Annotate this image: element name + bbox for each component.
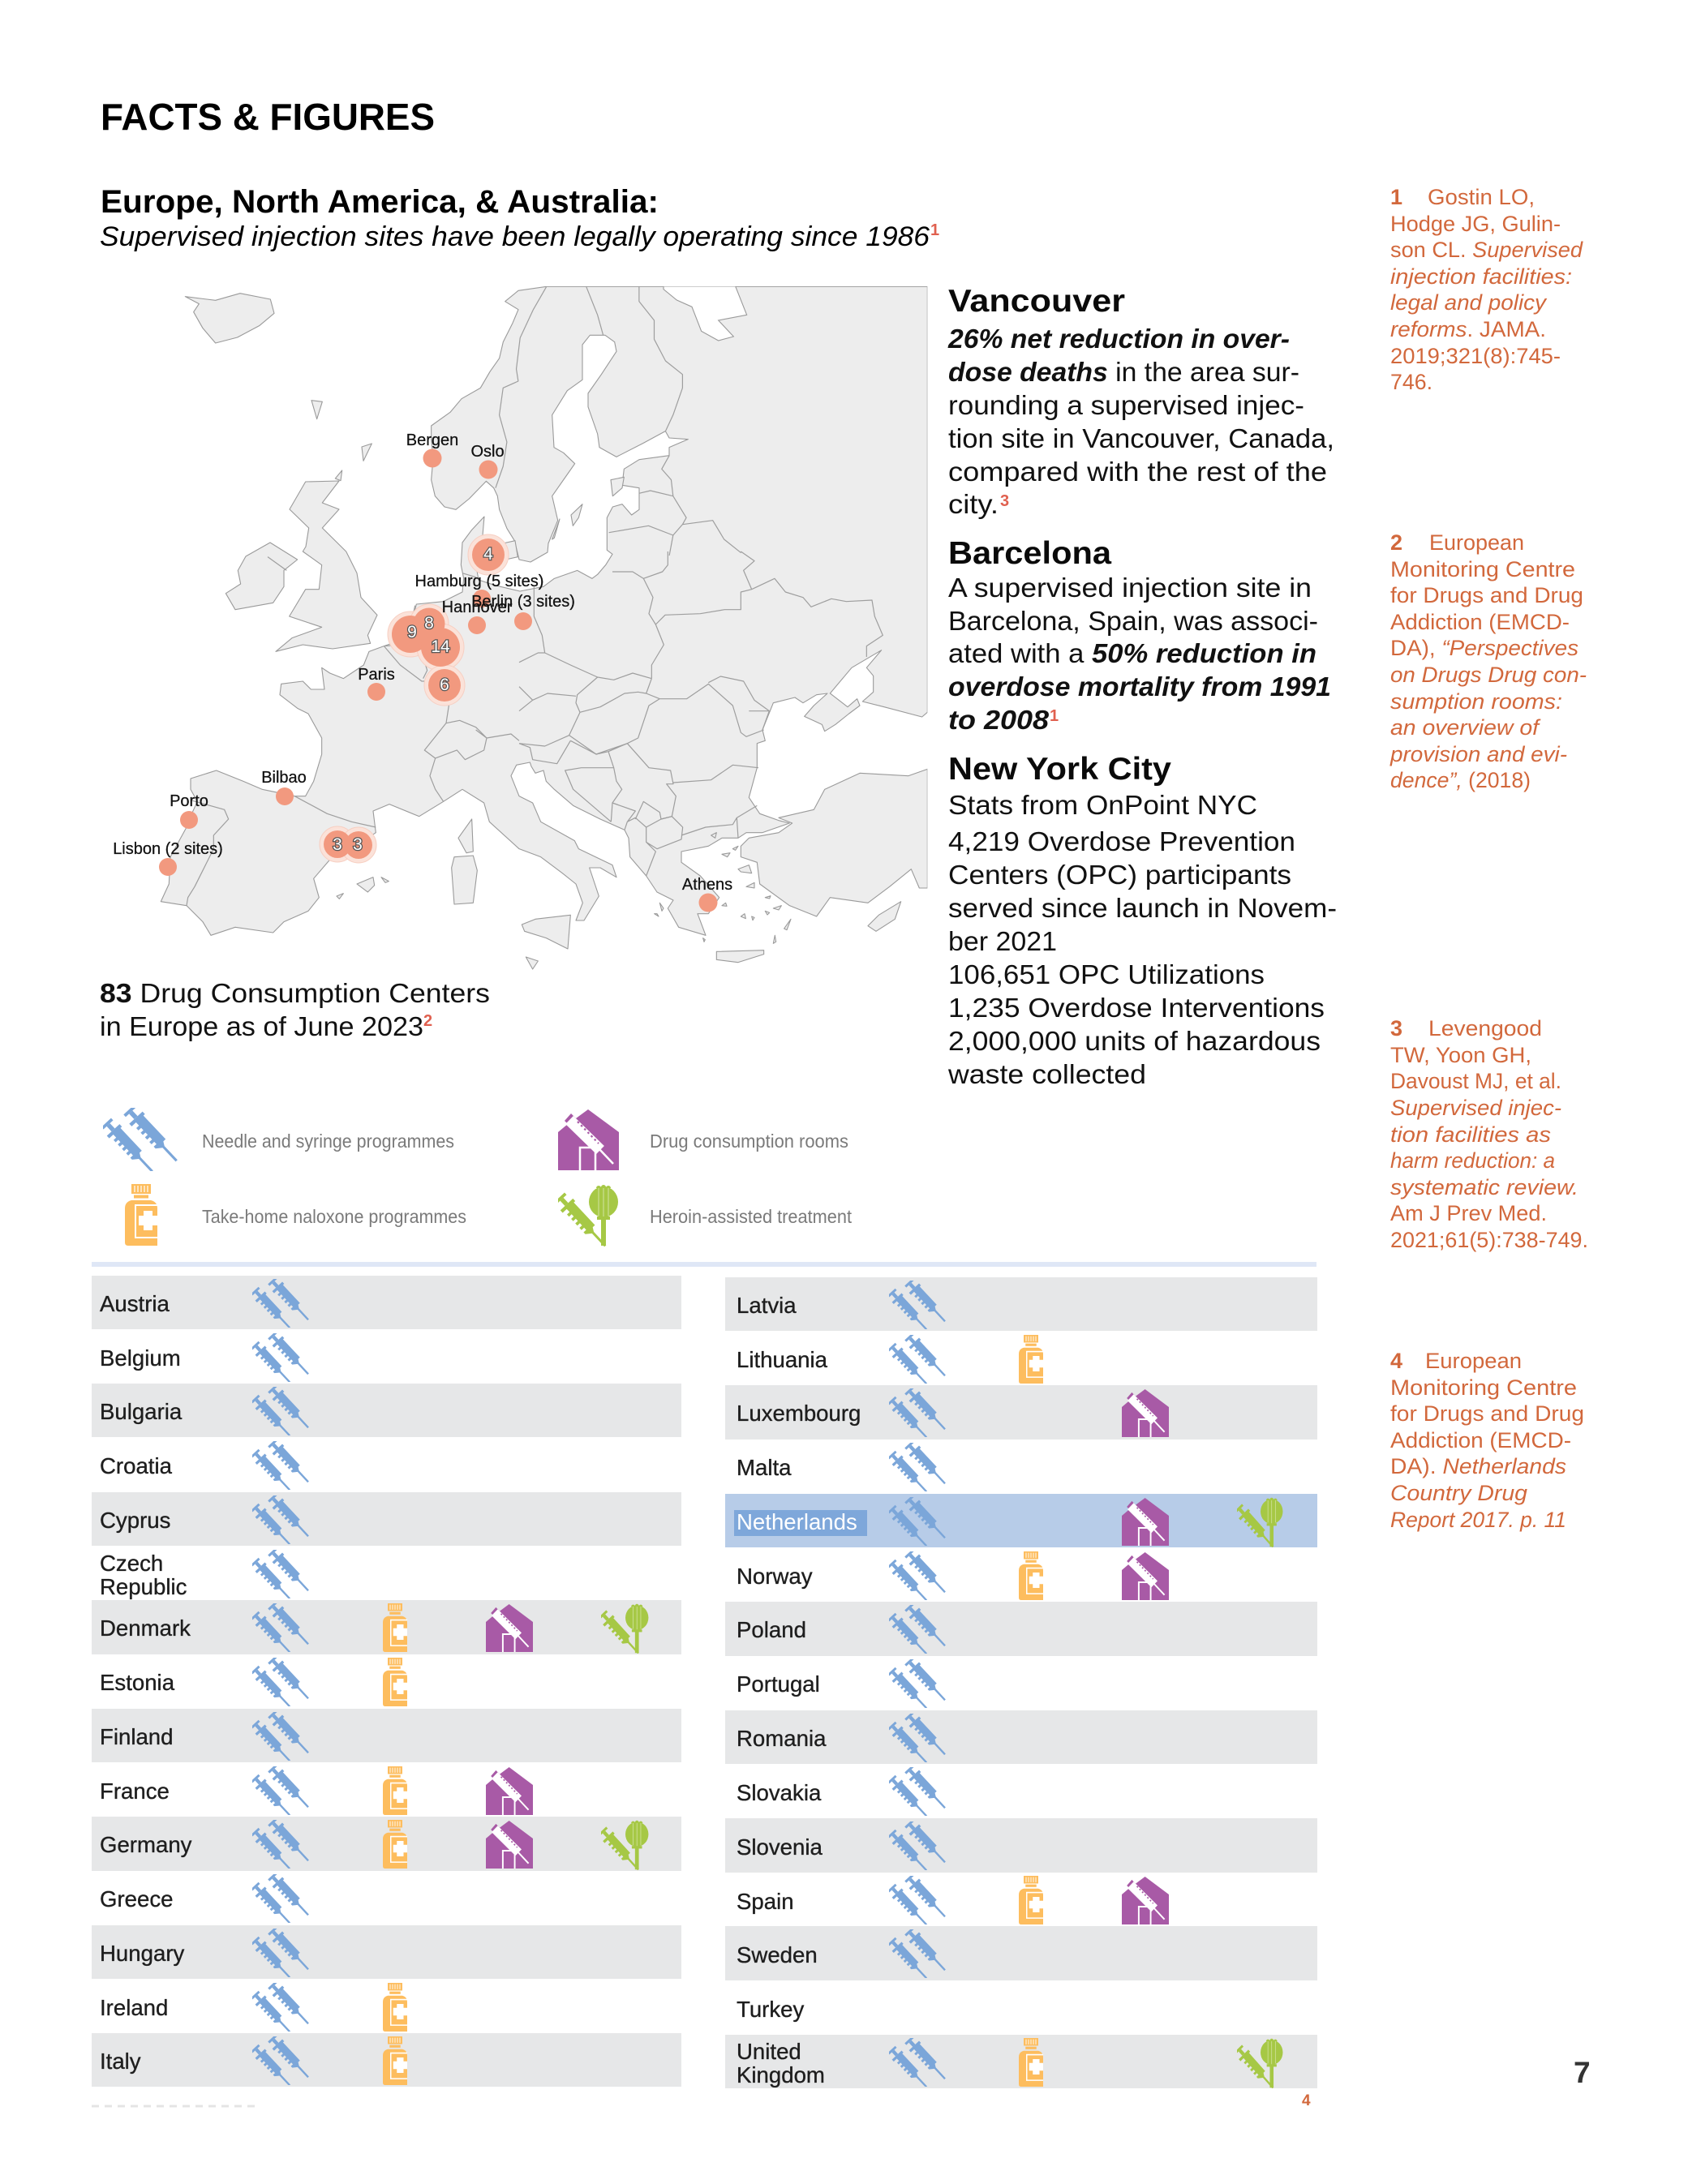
row: Croatia [100, 1438, 313, 1495]
panel: New York City [947, 752, 1337, 1089]
map labels: 3 [333, 835, 342, 854]
row: Cyprus [92, 1492, 681, 1549]
row: Estonia: Estonia [100, 1670, 175, 1695]
reference 2: provision and evi- [1389, 742, 1567, 766]
reference 1 [1390, 185, 1583, 394]
map labels: Hannover [442, 599, 513, 616]
map labels: 8 [424, 614, 434, 633]
row: Finland [92, 1709, 681, 1766]
row: Poland: Poland [737, 1617, 806, 1642]
panel: Vancouver: 26% net reduction in over- [947, 324, 1290, 354]
row: Italy: Italy [100, 2049, 141, 2074]
row: Finland: Finland [100, 1724, 174, 1749]
panel: New York City: 4,219 Overdose Prevention [948, 826, 1295, 856]
panel: New York City: Stats from OnPoint NYC [948, 790, 1257, 820]
footnote marker: 4 [1302, 2092, 1311, 2109]
row: Luxembourg: Luxembourg [737, 1401, 861, 1426]
reference 3: 3 [1390, 1016, 1402, 1041]
row: Austria: Austria [100, 1291, 170, 1316]
row: Ireland: Ireland [100, 1995, 168, 2020]
row: United Kingdom: Kingdom [737, 2062, 825, 2087]
panel: New York City: New York City [948, 752, 1171, 787]
map labels: Porto [170, 792, 208, 810]
reference 4: Report 2017. p. 11 [1390, 1508, 1566, 1532]
reference 1: Hodge JG, Gulin- [1390, 212, 1561, 236]
reference 2: dence”, (2018) [1390, 768, 1531, 792]
row: United Kingdom [725, 2035, 1317, 2092]
panel: Barcelona [948, 536, 1331, 735]
panel: Barcelona: Barcelona, Spain, was associ- [948, 606, 1318, 636]
map caption: 2 [423, 1012, 432, 1030]
map labels: Hamburg (5 sites) [415, 573, 543, 590]
map labels: Bergen [406, 431, 458, 449]
reference 1: injection facilities: [1390, 264, 1572, 289]
map of Europe [113, 286, 927, 969]
reference 1: 1 [1390, 185, 1402, 209]
table: left column [92, 1276, 681, 2090]
page number: 7 [1574, 2056, 1591, 2089]
row: Latvia [725, 1277, 1317, 1334]
reference 3: Supervised injec- [1390, 1096, 1561, 1120]
reference 3: TW, Yoon GH, [1390, 1043, 1531, 1067]
icon: needle and syringe [100, 1104, 183, 1178]
map caption: 83 Drug Consumption Centers [100, 978, 490, 1008]
reference 3: systematic review. [1390, 1175, 1578, 1199]
row: France [100, 1763, 533, 1820]
reference 4: Addiction (EMCD- [1390, 1428, 1571, 1452]
reference 2: Addiction (EMCD- [1390, 610, 1570, 634]
row: Slovenia [725, 1818, 1317, 1875]
row: Spain: Spain [737, 1889, 794, 1914]
map caption: in Europe as of June 2023 [100, 1011, 423, 1041]
reference 3: harm reduction: a [1390, 1148, 1555, 1173]
row: Germany: Germany [100, 1832, 192, 1857]
reference 3: Levengood [1428, 1016, 1542, 1041]
panel: Barcelona: 1 [1050, 707, 1059, 725]
reference 2: sumption rooms: [1390, 689, 1562, 714]
row: Hungary: Hungary [100, 1941, 185, 1966]
panel: Barcelona: overdose mortality from 1991 [948, 672, 1331, 702]
row: Greece [100, 1871, 313, 1928]
map labels: 4 [483, 545, 493, 564]
panel: New York City: 2,000,000 units of hazardous [948, 1026, 1321, 1056]
row: Sweden: Sweden [737, 1942, 818, 1967]
subheading: 1 [930, 221, 939, 239]
row: Malta [737, 1440, 950, 1496]
reference 3: Davoust MJ, et al. [1390, 1069, 1561, 1093]
legend label: heroin-assisted treatment: Heroin-assisted treatment [650, 1206, 853, 1227]
reference 2: an overview of [1390, 715, 1541, 740]
reference 1: son CL. Supervised [1390, 238, 1583, 262]
row: Slovenia: Slovenia [737, 1834, 823, 1860]
row: Sweden [725, 1926, 1317, 1983]
icon: heroin-assisted treatment [553, 1185, 618, 1252]
reference 4: for Drugs and Drug [1390, 1401, 1584, 1426]
panel: Barcelona: Barcelona [948, 536, 1111, 571]
reference 1: Gostin LO, [1428, 185, 1535, 209]
reference 4: Country Drug [1390, 1481, 1527, 1505]
reference 2: for Drugs and Drug [1390, 583, 1583, 607]
reference 2: on Drugs Drug con- [1390, 663, 1587, 687]
row: Lithuania [737, 1332, 1043, 1388]
panel: New York City: ber 2021 [948, 926, 1057, 956]
row: Croatia: Croatia [100, 1453, 173, 1478]
reference 2: DA), “Perspectives [1390, 636, 1578, 660]
map labels: Berlin (3 sites) [471, 593, 575, 611]
legend label: needle and syringe: Needle and syringe programmes [202, 1131, 454, 1152]
row: Denmark: Denmark [100, 1615, 191, 1641]
reference 4 [1390, 1349, 1584, 1532]
panel: New York City: Centers (OPC) participants [948, 860, 1291, 890]
row: Cyprus: Cyprus [100, 1508, 170, 1533]
legend label: take-home naloxone: Take-home naloxone programmes [202, 1206, 466, 1227]
row: Romania: Romania [737, 1726, 827, 1751]
row: Estonia [100, 1654, 407, 1711]
row: Czech Republic: Czech [100, 1551, 163, 1576]
panel: New York City: served since launch in Novem- [948, 893, 1337, 923]
panel: New York City: 1,235 Overdose Interventions [948, 993, 1325, 1023]
map markers [159, 449, 717, 912]
map labels: 9 [407, 623, 417, 641]
panel: Vancouver [947, 284, 1334, 519]
panel: New York City: waste collected [947, 1059, 1146, 1089]
row: Portugal: Portugal [737, 1671, 820, 1697]
row: Italy [92, 2033, 681, 2090]
reference 4: Monitoring Centre [1390, 1375, 1577, 1400]
panel: Barcelona: A supervised injection site in [948, 573, 1312, 603]
row: France: France [100, 1779, 170, 1804]
legend label: drug consumption rooms: Drug consumption rooms [650, 1131, 848, 1152]
reference 1: 746. [1390, 370, 1432, 394]
map labels [113, 431, 732, 894]
row: Lithuania: Lithuania [737, 1347, 828, 1372]
panel: Vancouver: Vancouver [948, 284, 1125, 319]
map labels: Bilbao [261, 769, 307, 787]
reference 2: European [1429, 530, 1524, 555]
panel: Barcelona: to 2008 [948, 705, 1050, 735]
row: Portugal [737, 1656, 950, 1713]
row: Germany [92, 1817, 681, 1874]
row: Netherlands (highlighted) [725, 1494, 1317, 1551]
row: Belgium [100, 1330, 313, 1387]
row: Latvia: Latvia [737, 1293, 797, 1318]
reference 3: Am J Prev Med. [1390, 1201, 1547, 1225]
row: Turkey: Turkey [737, 1997, 805, 2022]
row: Bulgaria [92, 1384, 681, 1440]
row: Malta: Malta [737, 1455, 792, 1480]
reference 1: 2019;321(8):745- [1390, 344, 1561, 368]
icon: naloxone bottle [125, 1184, 157, 1246]
row: Poland [725, 1602, 1317, 1658]
map labels: 3 [353, 835, 363, 854]
panel: Barcelona: ated with a 50% reduction in [948, 638, 1316, 668]
row: Denmark [92, 1600, 681, 1658]
row: Belgium: Belgium [100, 1345, 181, 1371]
reference 4: DA). Netherlands [1390, 1454, 1566, 1478]
row: Luxembourg [725, 1385, 1317, 1442]
row: Norway: Norway [737, 1564, 813, 1589]
panel: Vancouver: dose deaths in the area sur- [948, 357, 1299, 387]
row: Bulgaria: Bulgaria [100, 1399, 183, 1424]
panel: Vancouver: 3 [1000, 492, 1009, 510]
row: Netherlands (highlighted): Netherlands [737, 1509, 857, 1534]
legend [100, 1104, 853, 1252]
panel: Vancouver: tion site in Vancouver, Canada, [948, 423, 1334, 453]
row: Romania [725, 1710, 1317, 1767]
reference 2: 2 [1390, 530, 1402, 555]
title: FACTS & FIGURES [101, 96, 435, 138]
map caption [100, 978, 490, 1041]
row: Czech Republic: Republic [100, 1574, 187, 1599]
map labels: Athens [682, 876, 732, 894]
row: Spain [737, 1873, 1169, 1929]
heading: regions: Europe, North America, & Australia: [101, 184, 659, 220]
row: Hungary [92, 1925, 681, 1982]
subheading: Supervised injection sites have been legally operating since 1986 [100, 221, 930, 252]
reference 1: legal and policy [1390, 290, 1548, 315]
reference 4: European [1425, 1349, 1522, 1373]
map labels: Lisbon (2 sites) [113, 840, 223, 858]
map labels: Oslo [470, 443, 505, 461]
reference 4: 4 [1390, 1349, 1402, 1373]
table: right column [725, 1277, 1317, 2092]
row: United Kingdom: United [737, 2039, 801, 2064]
panel: New York City: 106,651 OPC Utilizations [948, 959, 1265, 989]
map labels: Paris [358, 666, 395, 684]
reference 1: reforms. JAMA. [1390, 317, 1546, 341]
row: Ireland [100, 1980, 407, 2036]
reference 2: Monitoring Centre [1390, 557, 1575, 581]
map labels: 14 [431, 637, 450, 656]
row: Slovakia [737, 1764, 950, 1821]
icon: drug consumption room [558, 1109, 619, 1170]
row: Austria [92, 1276, 681, 1332]
panel: Vancouver: compared with the rest of the [948, 457, 1327, 487]
reference 3: 2021;61(5):738-749. [1390, 1228, 1588, 1252]
row: Greece: Greece [100, 1886, 174, 1912]
reference 3: tion facilities as [1390, 1122, 1551, 1147]
row: Norway [737, 1548, 1169, 1605]
reference 3 [1390, 1016, 1588, 1252]
reference 2 [1389, 530, 1587, 792]
panel: Vancouver: rounding a supervised injec- [948, 390, 1304, 420]
map labels: 6 [440, 676, 449, 694]
panel: Vancouver: city. [948, 489, 999, 519]
row: Slovakia: Slovakia [737, 1780, 822, 1805]
row: Czech Republic [100, 1547, 313, 1603]
